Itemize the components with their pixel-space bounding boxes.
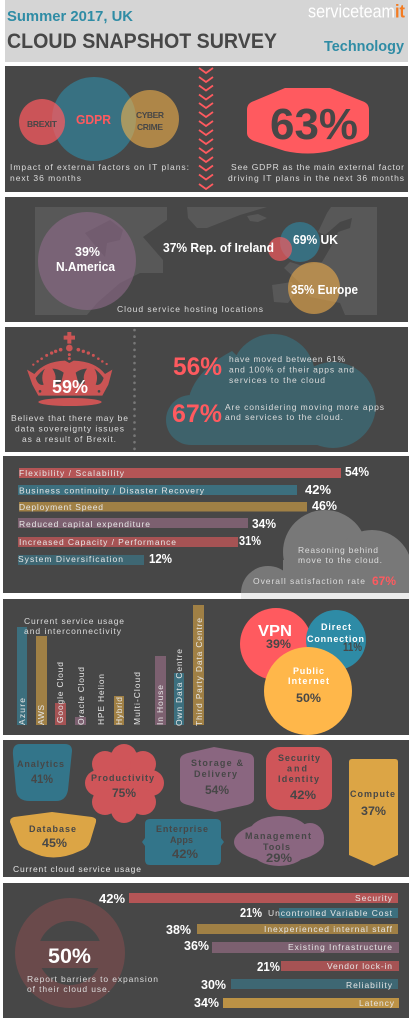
stat: satisfaction: 67% bbox=[372, 574, 396, 588]
bar: latency bbox=[194, 996, 399, 1010]
badge: 63% bbox=[247, 88, 369, 154]
badge: enterprise apps: Enterprise bbox=[156, 824, 208, 834]
badge: productivity bbox=[85, 744, 164, 823]
bubble: direct connection: Connection bbox=[307, 634, 364, 644]
logo: it bbox=[395, 2, 405, 22]
badge: storage and delivery: Storage & bbox=[191, 758, 244, 768]
badge: storage and delivery: 54% bbox=[205, 783, 229, 797]
bubble: direct connection bbox=[306, 610, 366, 670]
caption: hosting: Cloud service hosting locations bbox=[117, 304, 263, 314]
bar: increased capacity: 31% bbox=[239, 534, 261, 548]
chevron divider bbox=[199, 68, 213, 189]
bubble: public internet: 50% bbox=[296, 691, 321, 705]
bar: security bbox=[99, 892, 398, 906]
caption: sovereignty: data sovereignty issues bbox=[15, 424, 124, 434]
stat: 56%: services to the cloud bbox=[229, 375, 325, 385]
stat: 56%: have moved between 61% bbox=[229, 354, 345, 364]
stat: 59%: 59% bbox=[52, 377, 88, 397]
bubble: VPN: 39% bbox=[266, 637, 291, 651]
badge: compute: Compute bbox=[350, 789, 395, 799]
bar: vendor lock-in: Vendor lock-in bbox=[327, 961, 392, 971]
column chart: service usage: Azure bbox=[17, 698, 27, 725]
bar: deployment speed: 46% bbox=[312, 499, 337, 513]
column chart: service usage: Hybrid bbox=[114, 697, 124, 725]
bar: reduced capex: Reduced capital expenditure bbox=[19, 519, 150, 529]
stat: 56%: 56% bbox=[173, 353, 222, 381]
bar: inexperienced staff: 38% bbox=[166, 923, 191, 937]
panel: cloud service usage bbox=[3, 740, 409, 877]
panel: external factors bbox=[5, 66, 408, 192]
column chart: service usage: Google Cloud bbox=[55, 662, 65, 723]
bubble: North America: 39% bbox=[75, 245, 100, 259]
bar: business continuity: Business continuity / Disaster Recovery bbox=[19, 486, 205, 496]
bar: business continuity bbox=[18, 483, 331, 497]
date heading: Summer 2017, UK bbox=[7, 8, 133, 25]
caption: barriers: Report barriers to expansion bbox=[27, 974, 158, 984]
bar: deployment speed bbox=[19, 499, 337, 513]
badge: 63%: 63% bbox=[270, 100, 358, 149]
caption: reasoning: move to the cloud. bbox=[298, 555, 382, 565]
bubble: UK bbox=[280, 222, 338, 262]
badge: analytics: 41% bbox=[31, 772, 53, 786]
bar: latency: Latency bbox=[359, 998, 395, 1008]
bar chart: barriers bbox=[99, 892, 399, 1010]
caption: impact bbox=[10, 162, 189, 183]
badge: management tools: 29% bbox=[266, 851, 292, 865]
bar: business continuity: 42% bbox=[305, 483, 331, 497]
column chart: service usage: Oracle Cloud bbox=[76, 667, 86, 725]
badge: analytics bbox=[13, 744, 72, 801]
bar: latency: 34% bbox=[194, 996, 219, 1010]
caption: GDPR: See GDPR as the main external factor bbox=[231, 162, 404, 172]
logo: serviceteam bbox=[308, 2, 395, 22]
bubble: direct connection: 11% bbox=[343, 640, 362, 654]
bubble: North America: N.America bbox=[56, 260, 116, 274]
badge: security and identity: and bbox=[287, 764, 307, 774]
venn: external factors bbox=[19, 77, 179, 161]
badge: enterprise apps bbox=[142, 819, 224, 865]
column chart: service usage: Multi-Cloud bbox=[132, 672, 142, 725]
bar: security: 42% bbox=[99, 892, 125, 906]
bar: deployment speed: Deployment Speed bbox=[19, 502, 103, 512]
caption: reasoning: Reasoning behind bbox=[298, 545, 378, 555]
caption: cloud usage: Current cloud service usage bbox=[13, 864, 141, 874]
badge: management tools: Management bbox=[245, 831, 311, 841]
badge: compute bbox=[349, 759, 398, 866]
bar: vendor lock-in: 21% bbox=[257, 960, 280, 974]
stat: 67% bbox=[172, 400, 384, 428]
column chart: service usage: Own Data Centre bbox=[174, 649, 184, 726]
donut: 50% bbox=[26, 910, 114, 996]
caption: impact: next 36 months bbox=[10, 173, 81, 183]
bubble: VPN bbox=[240, 608, 312, 680]
column chart: service usage: HPE Helion bbox=[96, 674, 106, 725]
bar: increased capacity bbox=[18, 534, 261, 548]
sector label: Technology bbox=[324, 39, 404, 55]
bar: inexperienced staff bbox=[166, 923, 398, 937]
bar: flexibility: Flexibility / Scalability bbox=[19, 468, 125, 478]
bar: reliability bbox=[201, 978, 398, 992]
badge: compute: 37% bbox=[361, 804, 386, 818]
bar: existing infrastructure: 36% bbox=[184, 939, 209, 953]
badge: analytics: Analytics bbox=[17, 759, 64, 769]
bubble: Ireland: 37% Rep. of Ireland bbox=[163, 241, 274, 255]
bubble: Europe: 35% Europe bbox=[291, 283, 358, 297]
bubble: public internet: Internet bbox=[288, 676, 329, 686]
badge: enterprise apps: Apps bbox=[170, 835, 193, 845]
bar: reduced capex bbox=[18, 517, 276, 531]
cloud bbox=[166, 334, 376, 448]
bubble: direct connection: Direct bbox=[321, 622, 351, 632]
venn: external factors: CRIME bbox=[137, 122, 163, 132]
badge: storage and delivery bbox=[180, 747, 254, 812]
caption: sovereignty: as a result of Brexit. bbox=[22, 434, 116, 444]
column chart: service usage: AWS bbox=[36, 705, 46, 725]
bar: variable cost bbox=[240, 906, 398, 920]
stat: satisfaction: Overall satisfaction rate bbox=[253, 576, 365, 586]
bar: system diversification: 12% bbox=[149, 552, 172, 566]
badge: security and identity bbox=[266, 747, 332, 810]
badge: productivity: Productivity bbox=[91, 773, 154, 783]
caption: service usage: and interconnectivity bbox=[24, 626, 122, 636]
bubble: UK: 69% UK bbox=[293, 233, 338, 247]
badge: security and identity: Security bbox=[278, 753, 320, 763]
stat: 56% bbox=[173, 353, 354, 385]
panel: header bbox=[5, 0, 408, 62]
bar: flexibility: 54% bbox=[345, 465, 369, 479]
venn: external factors: BREXIT bbox=[27, 119, 58, 129]
badge: management tools: Tools bbox=[263, 842, 290, 852]
panel: hosting locations bbox=[5, 197, 408, 322]
bar: reliability: Reliability bbox=[346, 980, 393, 990]
grey cloud bbox=[241, 510, 409, 593]
bubble: public internet: Public bbox=[293, 666, 324, 676]
column chart: service usage: In House bbox=[155, 685, 165, 725]
panel: sovereignty and migration bbox=[5, 327, 408, 452]
bar: security: Security bbox=[355, 893, 393, 903]
bar chart: reasons bbox=[18, 465, 369, 566]
icon: crown bbox=[27, 332, 112, 406]
panel: reasons for moving to cloud bbox=[3, 456, 409, 599]
badge: database: 45% bbox=[42, 836, 67, 850]
panel: barriers bbox=[3, 883, 409, 1018]
bubble: public internet bbox=[264, 647, 352, 735]
caption: service usage bbox=[24, 616, 124, 636]
caption: barriers: of their cloud use. bbox=[27, 984, 110, 994]
badge: database: Database bbox=[29, 824, 76, 834]
caption: barriers bbox=[27, 974, 158, 994]
donut: 50%: 50% bbox=[48, 944, 91, 968]
title: CLOUD SNAPSHOT SURVEY bbox=[7, 30, 277, 53]
column chart: service usage: Third Party Data Centre bbox=[194, 618, 204, 726]
caption: reasoning bbox=[298, 545, 382, 565]
bar: flexibility bbox=[19, 465, 369, 479]
bar: variable cost: Uncontrolled Variable Cost bbox=[268, 908, 393, 918]
bubble: Europe bbox=[288, 262, 358, 314]
badge: security and identity: Identity bbox=[278, 774, 319, 784]
stat: 67%: and services to the cloud. bbox=[225, 412, 343, 422]
bubble: VPN: VPN bbox=[258, 623, 292, 640]
caption: service usage: Current service usage bbox=[24, 616, 124, 626]
column chart: service usage bbox=[17, 605, 204, 726]
badge: management tools bbox=[234, 816, 324, 866]
venn: external factors: CYBER bbox=[136, 110, 164, 120]
stat: 56%: and 100% of their apps and bbox=[229, 364, 354, 374]
bar: reduced capex: 34% bbox=[252, 517, 276, 531]
panel: service usage and interconnectivity bbox=[3, 599, 409, 735]
caption: GDPR: driving IT plans in the next 36 months bbox=[228, 173, 404, 183]
bubble: North America bbox=[38, 212, 136, 310]
caption: sovereignty bbox=[11, 413, 128, 444]
bar: existing infrastructure bbox=[184, 939, 399, 953]
caption: GDPR bbox=[228, 162, 404, 183]
caption: sovereignty: Believe that there may be bbox=[11, 413, 128, 423]
badge: storage and delivery: Delivery bbox=[194, 769, 237, 779]
badge: productivity: 75% bbox=[112, 786, 136, 800]
venn: external factors: GDPR bbox=[76, 112, 112, 127]
stat: 67%: 67% bbox=[172, 400, 222, 428]
badge: database bbox=[10, 812, 96, 858]
bar: system diversification: System Diversification bbox=[18, 554, 123, 564]
bubble: Ireland bbox=[163, 237, 292, 261]
dotted divider bbox=[133, 330, 136, 450]
stat: 67%: Are considering moving more apps bbox=[225, 402, 384, 412]
bar: increased capacity: Increased Capacity / Performance bbox=[19, 537, 176, 547]
badge: enterprise apps: 42% bbox=[172, 847, 198, 861]
bar: existing infrastructure: Existing Infrastructure bbox=[288, 942, 392, 952]
bar: inexperienced staff: Inexperienced internal staff bbox=[264, 924, 393, 934]
caption: impact: Impact of external factors on IT plans: bbox=[10, 162, 189, 172]
bar: reliability: 30% bbox=[201, 978, 226, 992]
stat: satisfaction bbox=[253, 574, 396, 588]
world map bbox=[35, 207, 377, 315]
bar: variable cost: 21% bbox=[240, 906, 262, 920]
badge: security and identity: 42% bbox=[290, 788, 316, 802]
bar: system diversification bbox=[18, 552, 172, 566]
bar: vendor lock-in bbox=[257, 960, 399, 974]
